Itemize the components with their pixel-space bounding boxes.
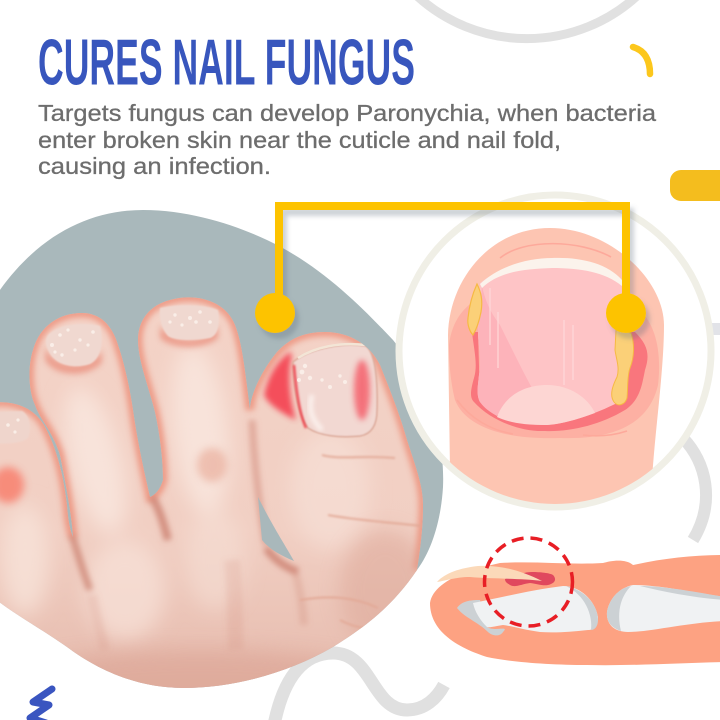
blob background bbox=[0, 200, 460, 700]
left dot bbox=[255, 293, 295, 333]
grey wave bbox=[274, 653, 444, 720]
yellow pill bbox=[670, 170, 720, 201]
finger bbox=[448, 228, 664, 520]
yellow arc accent bbox=[633, 47, 650, 74]
toe wrinkles bbox=[300, 455, 422, 630]
toe dividers bbox=[72, 420, 304, 650]
foot bbox=[0, 297, 430, 720]
inflamed red rim bbox=[471, 332, 648, 431]
nail bbox=[437, 566, 542, 582]
grey ring segment bbox=[683, 438, 706, 540]
toe side redness bbox=[0, 467, 24, 503]
circle frame bbox=[399, 195, 711, 507]
nail shine lines bbox=[490, 288, 573, 385]
dashed highlight circle bbox=[484, 538, 572, 626]
big toe nail bbox=[293, 344, 377, 437]
yellow pus right bbox=[612, 330, 634, 405]
nail shadow region bbox=[478, 286, 532, 416]
white nail tip band bbox=[480, 258, 622, 288]
blue zigzag bbox=[30, 689, 52, 720]
connector line bbox=[279, 206, 626, 313]
toe 2 nail bbox=[160, 305, 219, 340]
nail speckles bbox=[6, 310, 347, 434]
skin crease lines bbox=[500, 243, 627, 436]
toe 4 nail bbox=[0, 410, 28, 422]
title: CURES NAIL FUNGUS bbox=[38, 26, 415, 98]
fingertip illustration bbox=[448, 228, 664, 520]
bone 2 bbox=[607, 585, 720, 632]
bone 1 bbox=[457, 586, 598, 635]
top grey arc bbox=[416, 0, 638, 39]
description text: enter broken skin near the cuticle and nail fold, bbox=[38, 127, 561, 153]
bottom skin tone bbox=[77, 646, 319, 688]
upper skin lip bbox=[479, 248, 632, 310]
description text: Targets fungus can develop Paronychia, when bacteria bbox=[38, 100, 657, 126]
description text: causing an infection. bbox=[38, 153, 271, 179]
gap between big toe and second toe bbox=[258, 497, 294, 561]
side finger cross-section bbox=[430, 538, 720, 665]
finger bbox=[430, 555, 720, 665]
circle panel: nail illustration bbox=[399, 195, 711, 520]
right dot bbox=[606, 293, 646, 333]
nail bed bbox=[505, 572, 555, 586]
nail body bbox=[478, 265, 630, 425]
yellow pus left bbox=[468, 284, 482, 335]
grey side bar bbox=[708, 323, 720, 335]
description text bbox=[38, 100, 657, 179]
toe edge shading bbox=[0, 297, 423, 570]
lunula bbox=[497, 385, 595, 425]
callout connector with dots bbox=[255, 206, 646, 333]
toe 3 nail bbox=[46, 324, 102, 366]
toe highlights bbox=[1, 343, 370, 640]
nail fold lobes bbox=[449, 298, 659, 438]
photo blob: toes with infected nail bbox=[0, 210, 444, 688]
nail halos bbox=[45, 325, 218, 374]
joint mark bbox=[197, 448, 227, 482]
